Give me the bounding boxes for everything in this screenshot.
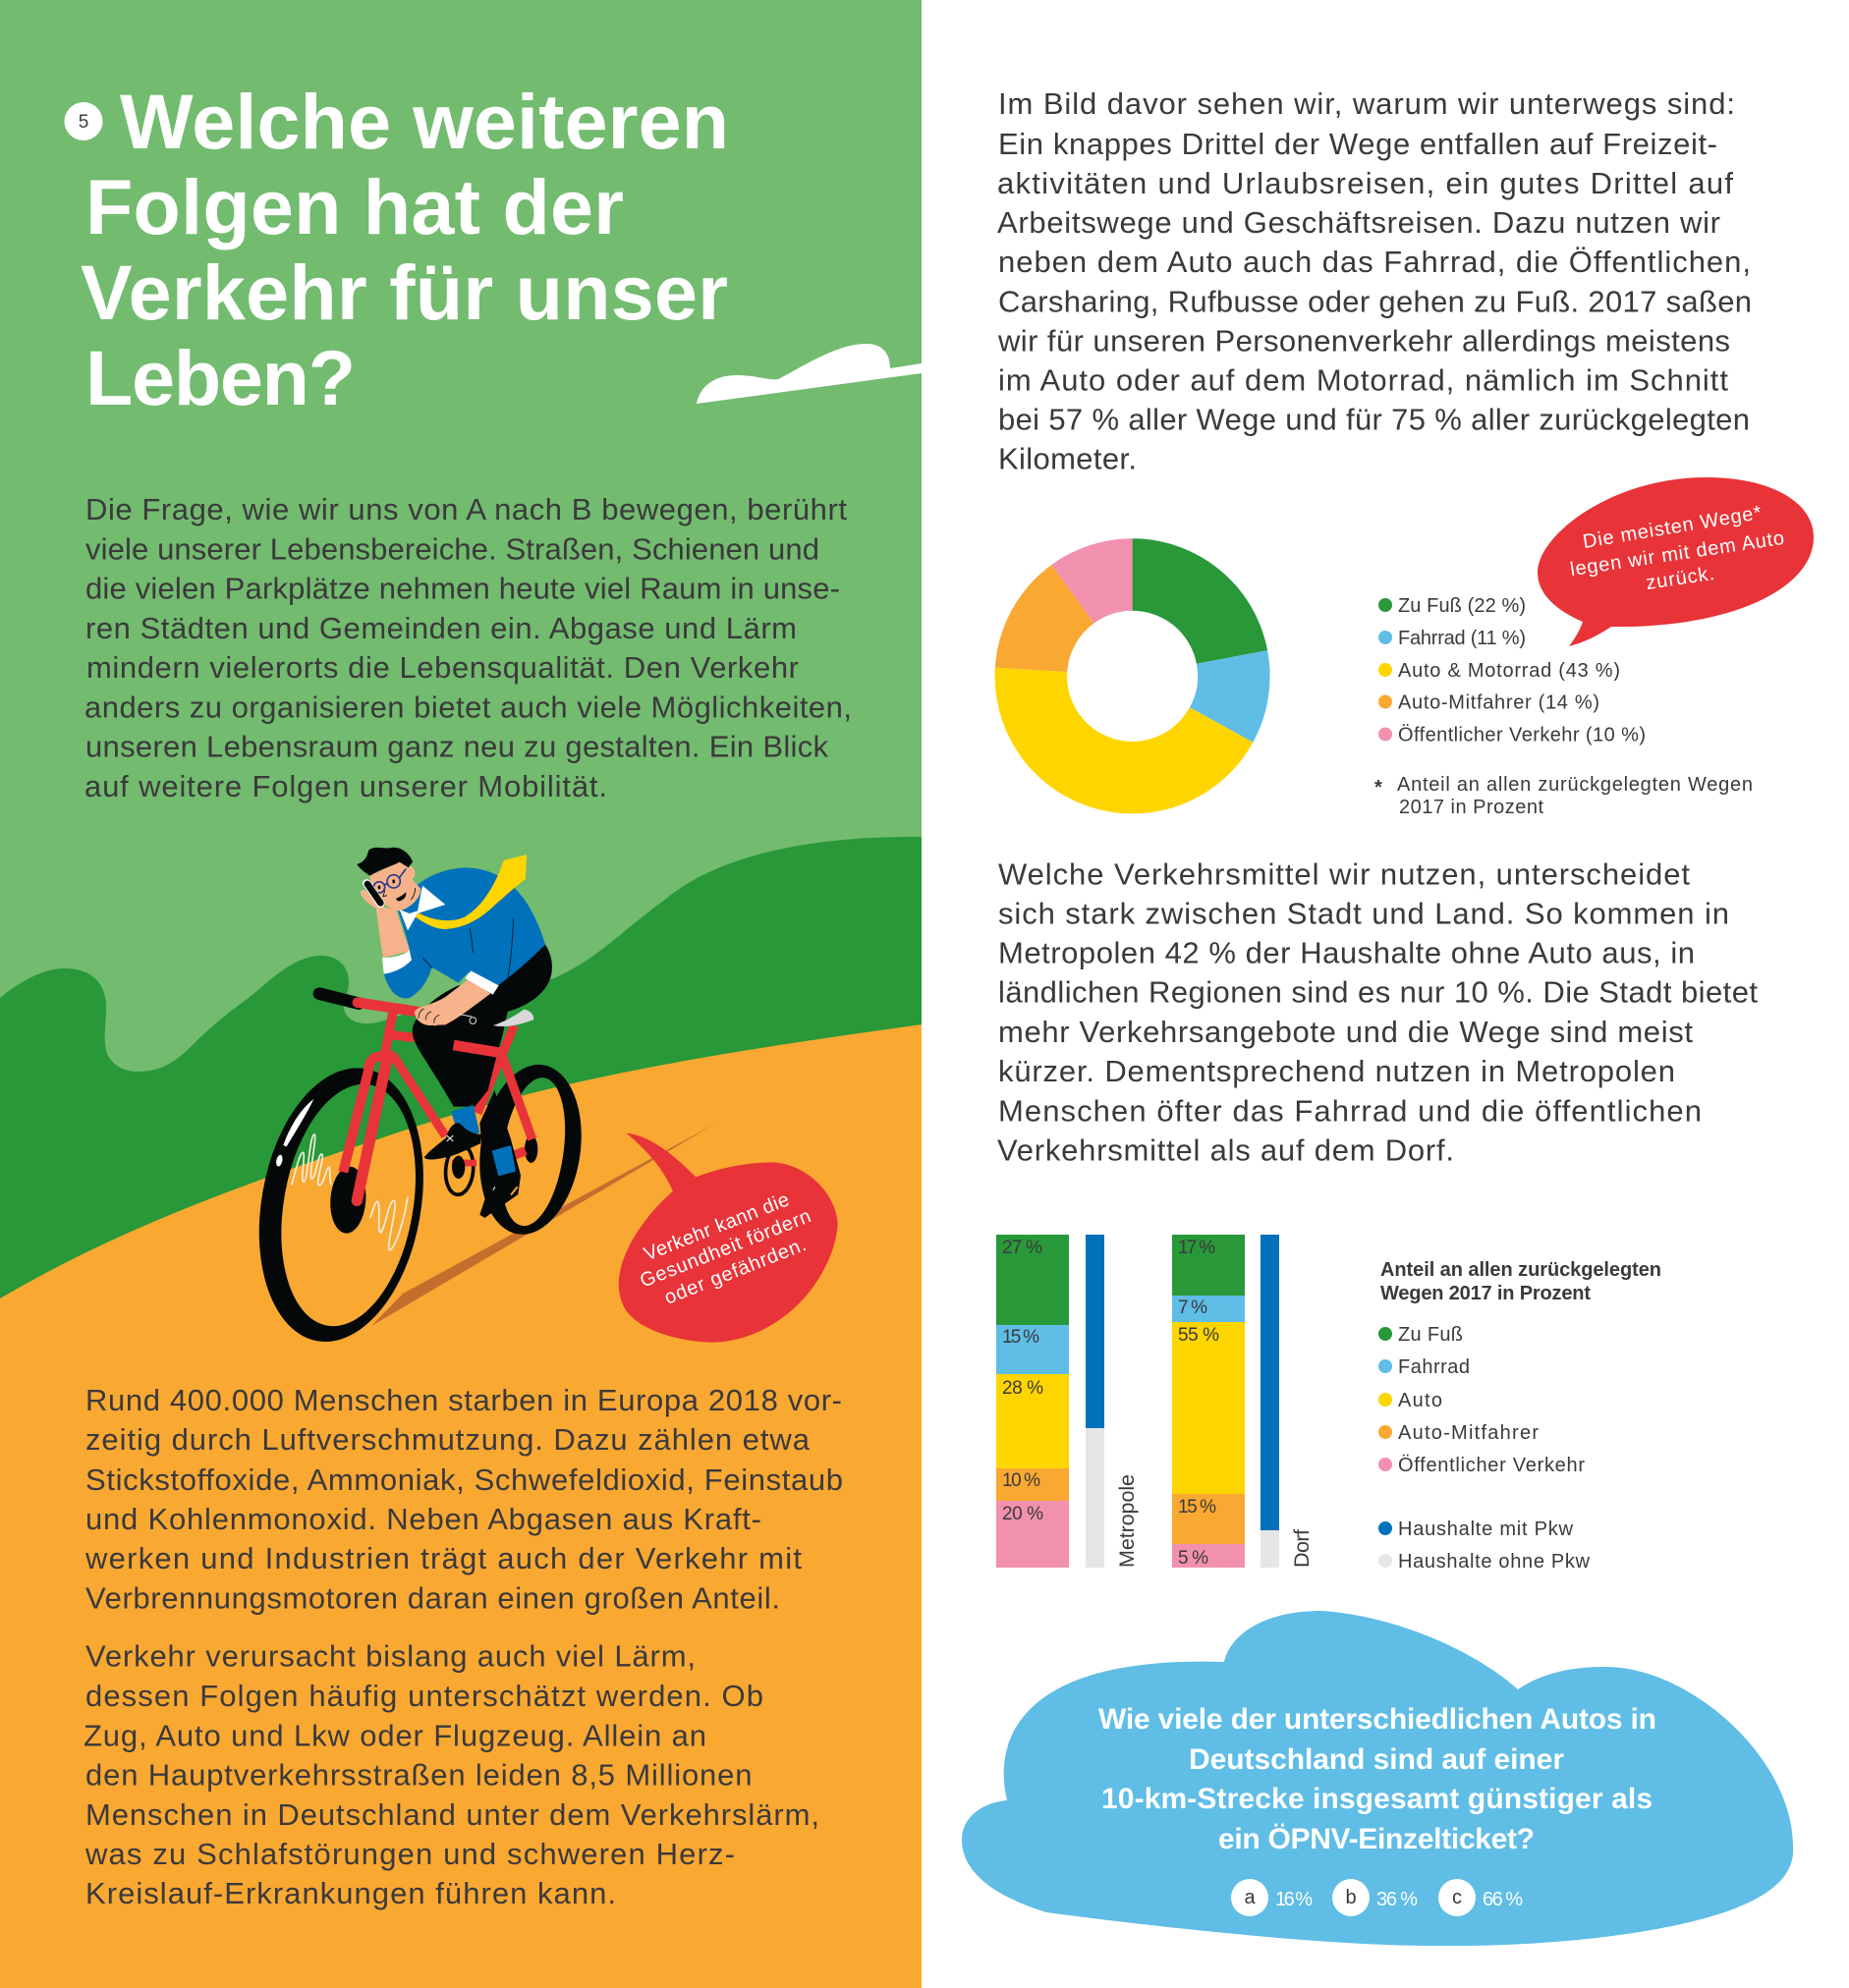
text block: reasons for travel: wir für unseren Personenverkehr allerdings meistens: [997, 324, 1730, 359]
quiz question: Wie viele der unterschiedlichen Autos in: [1098, 1703, 1656, 1736]
text block: noise: Zug, Auto und Lkw oder Flugzeug. Allein an: [84, 1719, 706, 1752]
heading cloud: [697, 344, 922, 404]
text block: city and country: mehr Verkehrsangebote und die Wege sind meist: [998, 1015, 1693, 1049]
section number badge: [65, 102, 102, 140]
speech bubble: health: Verkehr kann die: [641, 1188, 793, 1265]
quiz question: ein ÖPNV-Einzelticket?: [1218, 1823, 1535, 1855]
head: [369, 861, 420, 911]
legend: bar chart: Haushalte mit Pkw: [1398, 1519, 1574, 1540]
legend: donut chart: Zu Fuß (22 %): [1398, 595, 1526, 617]
stacked bar: Metropole: 28 %: [1002, 1378, 1043, 1399]
text block: noise: [84, 1638, 819, 1910]
text block: noise: was zu Schlafstörungen und schweren Herz-: [84, 1837, 735, 1871]
speech bubble: health: oder gefährden.: [661, 1234, 810, 1309]
face details: [378, 879, 416, 901]
footnote: [1374, 774, 1753, 818]
speech bubble: most trips: [1538, 477, 1814, 646]
text block: intro: unseren Lebensraum ganz neu zu gestalten. Ein Blick: [85, 729, 829, 764]
legend: bar chart: Anteil an allen zurückgelegten: [1380, 1259, 1661, 1281]
text block: reasons for travel: bei 57 % aller Wege und für 75 % aller zurückgelegten: [998, 403, 1750, 437]
stacked bar: Dorf: [1172, 1235, 1245, 1569]
text block: reasons for travel: Im Bild davor sehen wir, warum wir unterwegs sind:: [998, 86, 1735, 121]
stacked bar: Metropole: 27 %: [1002, 1238, 1042, 1258]
saddle: [493, 1010, 533, 1026]
text block: reasons for travel: im Auto oder auf dem Motorrad, nämlich im Schnitt: [998, 363, 1728, 398]
stacked bar: Dorf: 17 %: [1178, 1238, 1215, 1258]
text block: city and country: ländlichen Regionen sind es nur 10 %. Die Stadt bietet: [998, 975, 1758, 1010]
text block: noise: dessen Folgen häufig unterschätzt werden. Ob: [85, 1679, 763, 1713]
footnote: Anteil an allen zurückgelegten Wegen: [1397, 774, 1753, 796]
text block: noise: Verkehr verursacht bislang auch viel Lärm,: [85, 1638, 696, 1674]
text block: reasons for travel: neben dem Auto auch das Fahrrad, die Öffentlichen,: [998, 245, 1751, 279]
rear wheel and drivetrain: [444, 1065, 582, 1235]
stem: [385, 1012, 393, 1054]
legend: donut chart: Fahrrad (11 %): [1398, 628, 1526, 649]
quiz question: 10-km-Strecke insgesamt günstiger als: [1101, 1783, 1653, 1815]
phone: [366, 883, 380, 904]
bent forearm: [415, 979, 490, 1025]
stacked bar: Dorf: 5 %: [1178, 1548, 1208, 1569]
text block: air pollution: zeitig durch Luftverschmutzung. Dazu zählen etwa: [85, 1422, 811, 1457]
stacked bar: Dorf: 15 %: [1178, 1497, 1216, 1518]
text block: city and country: [997, 856, 1758, 1168]
raised forearm and hand: [361, 890, 410, 958]
legend: donut chart: Öffentlicher Verkehr (10 %): [1398, 725, 1646, 746]
legend: bar chart: Zu Fuß: [1398, 1324, 1463, 1346]
title: Verkehr für unser: [81, 248, 728, 336]
stacked bar: Metropole: 20 %: [1002, 1504, 1043, 1524]
household bar: Dorf: [1261, 1235, 1314, 1568]
text block: air pollution: Rund 400.000 Menschen starben in Europa 2018 vor-: [85, 1383, 842, 1417]
quiz answers: [1231, 1879, 1523, 1916]
handlebar grip: [319, 994, 359, 1004]
front foot: [424, 1105, 481, 1159]
text block: intro: ren Städten und Gemeinden ein. Abgase und Lärm: [85, 611, 797, 645]
text block: intro: [84, 492, 852, 803]
text block: city and country: Verkehrsmittel als auf dem Dorf.: [997, 1133, 1454, 1168]
hair: [357, 848, 413, 876]
collar: [400, 886, 445, 930]
legend: bar chart: Öffentlicher Verkehr: [1398, 1455, 1585, 1476]
text block: reasons for travel: Ein knappes Drittel der Wege entfallen auf Freizeit-: [998, 127, 1717, 161]
illustration: cyclist on phone: [259, 848, 582, 1342]
quiz answers: 16 %: [1275, 1889, 1313, 1910]
text block: intro: anders zu organisieren bietet auch viele Möglichkeiten,: [84, 690, 852, 724]
rider torso: [384, 867, 545, 998]
text block: city and country: Welche Verkehrsmittel wir nutzen, unterscheidet: [998, 856, 1690, 892]
title: Leben?: [85, 334, 356, 421]
front wheel: [259, 1054, 423, 1342]
quiz answers: a: [1244, 1887, 1256, 1908]
text block: air pollution: [84, 1383, 843, 1615]
quiz question: [1098, 1703, 1656, 1855]
legend: bar chart: Fahrrad: [1398, 1356, 1470, 1378]
text block: reasons for travel: Arbeitswege und Geschäftsreisen. Dazu nutzen wir: [997, 205, 1720, 240]
speech bubble: health: Gesundheit fördern: [637, 1205, 814, 1293]
illustration: bike shadow: [371, 1124, 715, 1326]
frame rear: [390, 1025, 532, 1139]
text block: reasons for travel: [997, 86, 1752, 476]
speech bubble: most trips: Die meisten Wege*: [1581, 502, 1764, 553]
text block: noise: Menschen in Deutschland unter dem Verkehrslärm,: [85, 1797, 819, 1832]
text block: city and country: kürzer. Dementsprechend nutzen in Metropolen: [998, 1054, 1675, 1088]
legend: donut chart: Auto-Mitfahrer (14 %): [1398, 691, 1599, 713]
hand over bar: [415, 1006, 445, 1025]
panel: left landscape background: [0, 0, 922, 1988]
quiz cloud: [962, 1611, 1793, 1946]
shirt creases: [422, 918, 514, 979]
title: [81, 78, 729, 421]
fingers and ring: [420, 1009, 476, 1023]
text block: reasons for travel: Kilometer.: [998, 442, 1137, 476]
text block: reasons for travel: aktivitäten und Urlaubsreisen, ein gutes Drittel auf: [997, 166, 1733, 200]
seat tube bar: [454, 1045, 499, 1053]
legend: bar chart: [1378, 1259, 1661, 1573]
quiz answers: c: [1452, 1887, 1462, 1908]
quiz answers: b: [1345, 1887, 1357, 1908]
legend: donut chart: [1378, 595, 1646, 746]
text block: intro: viele unserer Lebensbereiche. Straßen, Schienen und: [85, 532, 819, 566]
legend: bar chart: Wegen 2017 in Prozent: [1380, 1283, 1591, 1304]
text block: city and country: sich stark zwischen Stadt und Land. So kommen in: [998, 896, 1729, 931]
footnote: 2017 in Prozent: [1399, 797, 1543, 818]
legend: bar chart: Auto: [1398, 1390, 1442, 1411]
section number badge: 5: [79, 112, 88, 133]
stacked bar: Metropole: 15 %: [1002, 1327, 1039, 1348]
handlebar: [358, 1003, 418, 1012]
text block: reasons for travel: Carsharing, Rufbusse oder gehen zu Fuß. 2017 saßen: [998, 285, 1752, 318]
quiz answers: 66 %: [1483, 1889, 1523, 1910]
speech bubble: most trips: legen wir mit dem Auto: [1569, 527, 1786, 580]
household bar: Metropole: [1086, 1235, 1139, 1568]
legend: bar chart: Haushalte ohne Pkw: [1398, 1551, 1591, 1573]
text block: intro: mindern vielerorts die Lebensqualität. Den Verkehr: [86, 650, 799, 685]
text block: air pollution: Stickstoffoxide, Ammoniak, Schwefeldioxid, Feinstaub: [85, 1463, 843, 1497]
stacked bar: Dorf: 55 %: [1178, 1325, 1219, 1346]
text block: noise: den Hauptverkehrsstraßen leiden 8,5 Millionen: [85, 1758, 753, 1792]
title: Welche weiteren: [120, 78, 729, 165]
rider trousers: [413, 945, 552, 1107]
donut chart: [995, 538, 1270, 813]
text block: city and country: Metropolen 42 % der Haushalte ohne Auto aus, in: [998, 935, 1695, 970]
text block: air pollution: Verbrennungsmotoren daran einen großen Anteil.: [85, 1581, 780, 1615]
legend: bar chart: Auto-Mitfahrer: [1398, 1422, 1539, 1444]
tie: [416, 855, 527, 929]
glasses: [373, 868, 406, 893]
quiz question: Deutschland sind auf einer: [1189, 1743, 1564, 1776]
text block: intro: auf weitere Folgen unserer Mobilität.: [84, 769, 607, 803]
household bar: Dorf: Dorf: [1290, 1529, 1314, 1568]
text block: intro: die vielen Parkplätze nehmen heute viel Raum in unse-: [85, 572, 840, 606]
shirt cuff raised: [382, 951, 412, 974]
stacked bar: Metropole: [996, 1235, 1069, 1568]
stacked bar: Metropole: 10 %: [1002, 1470, 1040, 1491]
legend: donut chart: Auto & Motorrad (43 %): [1398, 660, 1620, 682]
footnote: *: [1374, 777, 1382, 799]
title: Folgen hat der: [85, 163, 624, 250]
speech bubble: most trips: zurück.: [1645, 563, 1715, 594]
text block: noise: Kreislauf-Erkrankungen führen kann.: [85, 1876, 616, 1910]
text block: air pollution: und Kohlenmonoxid. Neben Abgasen aus Kraft-: [85, 1502, 761, 1536]
text block: air pollution: werken und Industrien trägt auch der Verkehr mit: [84, 1541, 802, 1575]
household bar: Metropole: Metropole: [1115, 1474, 1139, 1568]
text block: intro: Die Frage, wie wir uns von A nach B bewegen, berührt: [85, 492, 847, 526]
quiz answers: 36 %: [1376, 1889, 1418, 1910]
text block: city and country: Menschen öfter das Fahrrad und die öffentlichen: [998, 1094, 1702, 1128]
speech bubble: health: [619, 1132, 838, 1343]
cuff: [465, 970, 499, 995]
stacked bar: Dorf: 7 %: [1178, 1298, 1207, 1318]
